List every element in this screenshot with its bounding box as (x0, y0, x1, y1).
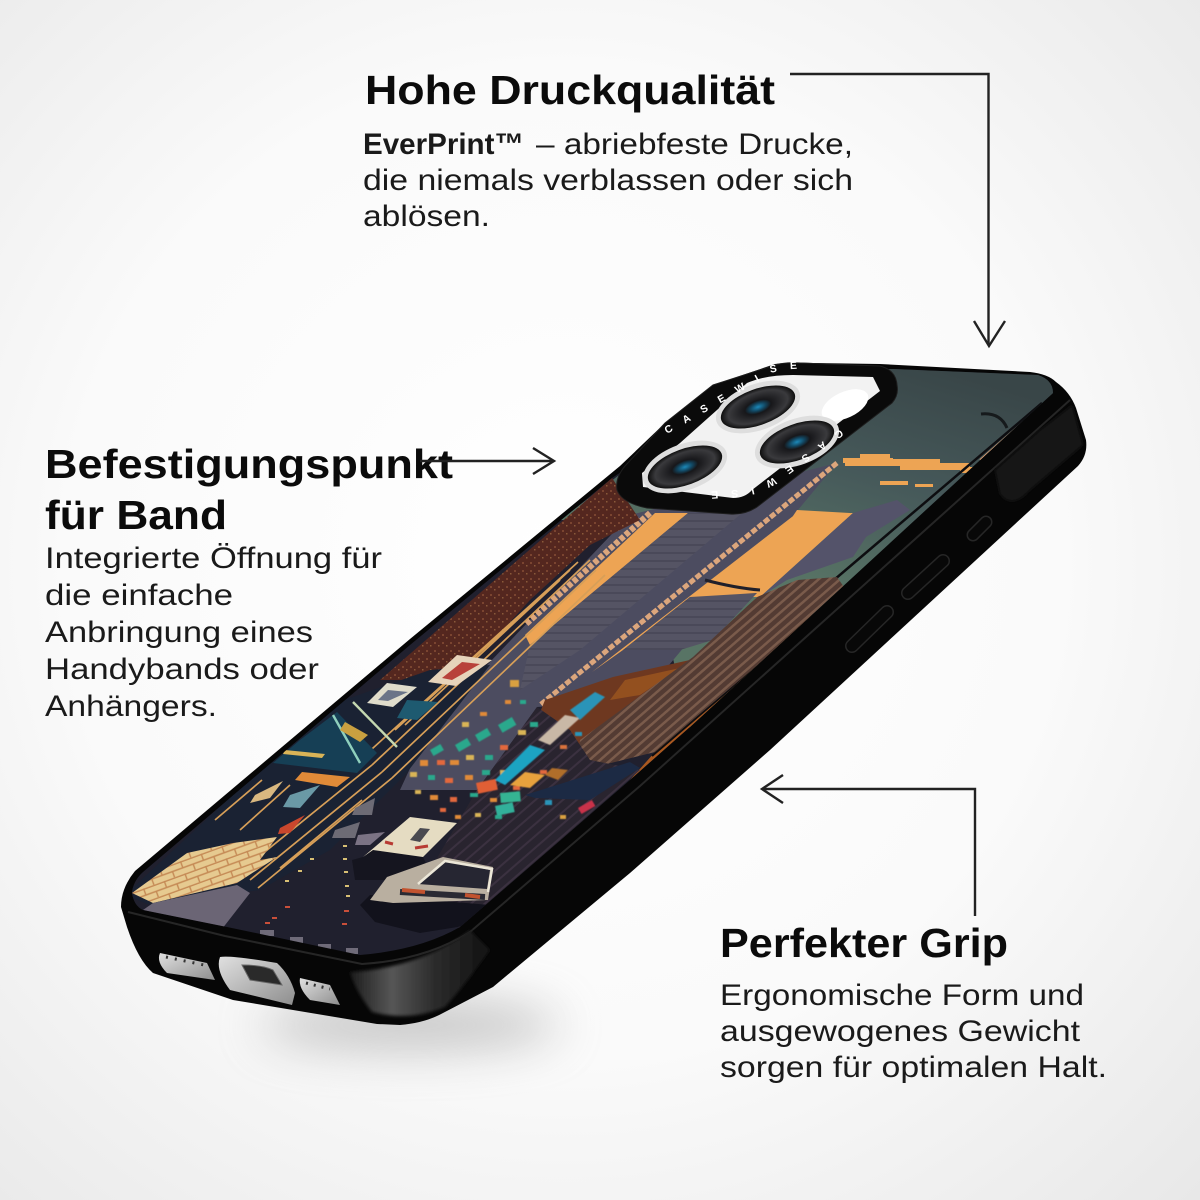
text block: strap attachment: die einfache (45, 579, 233, 612)
phone drop shadow (260, 1001, 560, 1049)
brand text top: CASEWISE (664, 362, 797, 433)
heading: print quality: Hohe Druckqualität (365, 67, 775, 113)
grey building right (760, 500, 910, 597)
text block: grip (720, 979, 1107, 1084)
arrow: grip (762, 775, 975, 916)
heading: grip: Perfekter Grip (720, 920, 1008, 966)
clouds (793, 454, 984, 518)
bottom right speaker grille (300, 978, 340, 1005)
sign teal (397, 700, 438, 720)
lens 1 (636, 430, 734, 504)
text block: print quality: ablösen. (363, 200, 490, 233)
heading: strap attachment: für Band (45, 492, 227, 538)
case body (121, 363, 1086, 1025)
small cars (332, 798, 385, 845)
phone case with printed artwork (121, 362, 1086, 1025)
red shop sign (278, 815, 305, 834)
left shop dark block (125, 665, 490, 905)
volume up button (908, 561, 943, 593)
orange sign right (476, 779, 498, 794)
side grip lighter panel (995, 405, 1083, 501)
grey building centre (623, 593, 757, 650)
brick wall (132, 837, 277, 903)
shop window one (250, 781, 283, 803)
heading: strap attachment: Befestigungspunkt (45, 441, 453, 487)
text block: strap attachment (45, 542, 382, 723)
right side shop buildings (430, 707, 640, 930)
heading: strap attachment (45, 441, 453, 538)
beige sign (538, 715, 580, 745)
sky (560, 360, 1060, 730)
arrow: print quality (790, 74, 1005, 346)
peach dotted line left (525, 513, 650, 625)
mute switch (973, 522, 986, 535)
text block: print quality: – abriebfeste Drucke, (536, 128, 853, 161)
text block: grip: ausgewogenes Gewicht (720, 1015, 1081, 1048)
brown sign (545, 768, 568, 780)
yellow sign lettering block (340, 722, 368, 742)
text block: print quality (363, 128, 853, 233)
peach dotted line centre (540, 463, 837, 705)
camera bump (616, 362, 898, 515)
left red building (380, 478, 640, 680)
rust buildings (541, 660, 688, 744)
charging port (219, 957, 295, 1005)
street lamp centre (705, 580, 760, 590)
dark wire lines (640, 403, 1042, 756)
volume down button (852, 612, 887, 646)
blue sign upper (570, 692, 605, 720)
car (360, 857, 493, 933)
neon lines (333, 702, 397, 763)
artwork base (132, 369, 1053, 955)
pavement blocks (260, 930, 358, 954)
bevel highlight along lower front edge (128, 400, 1070, 964)
pavement (143, 885, 250, 929)
grey road haze (400, 463, 837, 790)
sign cream lower (367, 683, 417, 707)
truck (352, 817, 457, 880)
bottom corner highlight (350, 930, 490, 1016)
green sign one (500, 791, 521, 803)
text block: strap attachment: Anbringung eines (45, 616, 313, 649)
amber sign (510, 772, 545, 788)
yellow wire bundle (215, 560, 605, 888)
camera window (642, 375, 880, 498)
side buttons (852, 522, 986, 646)
signs (250, 655, 492, 834)
arrow: strap attachment (420, 448, 554, 474)
sage strip near edge (1050, 394, 1052, 396)
lens 3 (748, 405, 846, 479)
glass highlight (817, 383, 873, 427)
orange stripe left (525, 513, 688, 645)
road centre dots (285, 845, 350, 897)
printed artwork (132, 369, 1053, 955)
bottom left speaker grille (159, 953, 215, 980)
text block: strap attachment: Handybands oder (45, 653, 319, 686)
text block: strap attachment: Anhängers. (45, 690, 217, 723)
orange stripe small (560, 497, 633, 560)
dark awning (525, 762, 640, 800)
orange stripe centre (592, 513, 853, 672)
sign cream top (428, 655, 492, 686)
green sign two (495, 802, 515, 816)
roof (575, 577, 846, 772)
sign orange (295, 772, 350, 787)
text block: grip: sorgen für optimalen Halt. (720, 1051, 1107, 1084)
lens 2 (709, 370, 807, 444)
teal triangle awning (273, 712, 377, 773)
red sign near edge (578, 800, 595, 814)
brand text bottom: CASEWISE (712, 430, 843, 499)
text block: grip: Ergonomische Form und (720, 979, 1084, 1012)
text block: print quality: die niemals verblassen oder sich (363, 164, 853, 197)
text block: print quality: EverPrint™ (363, 128, 524, 161)
grey tower stripe (520, 513, 742, 690)
traffic lights confetti (410, 680, 605, 819)
rust strip near edge (630, 616, 811, 780)
blue sign long (495, 745, 545, 785)
text block: strap attachment: Integrierte Öffnung für (45, 542, 382, 575)
street lamp top (981, 414, 1007, 428)
shop window two (283, 785, 320, 808)
